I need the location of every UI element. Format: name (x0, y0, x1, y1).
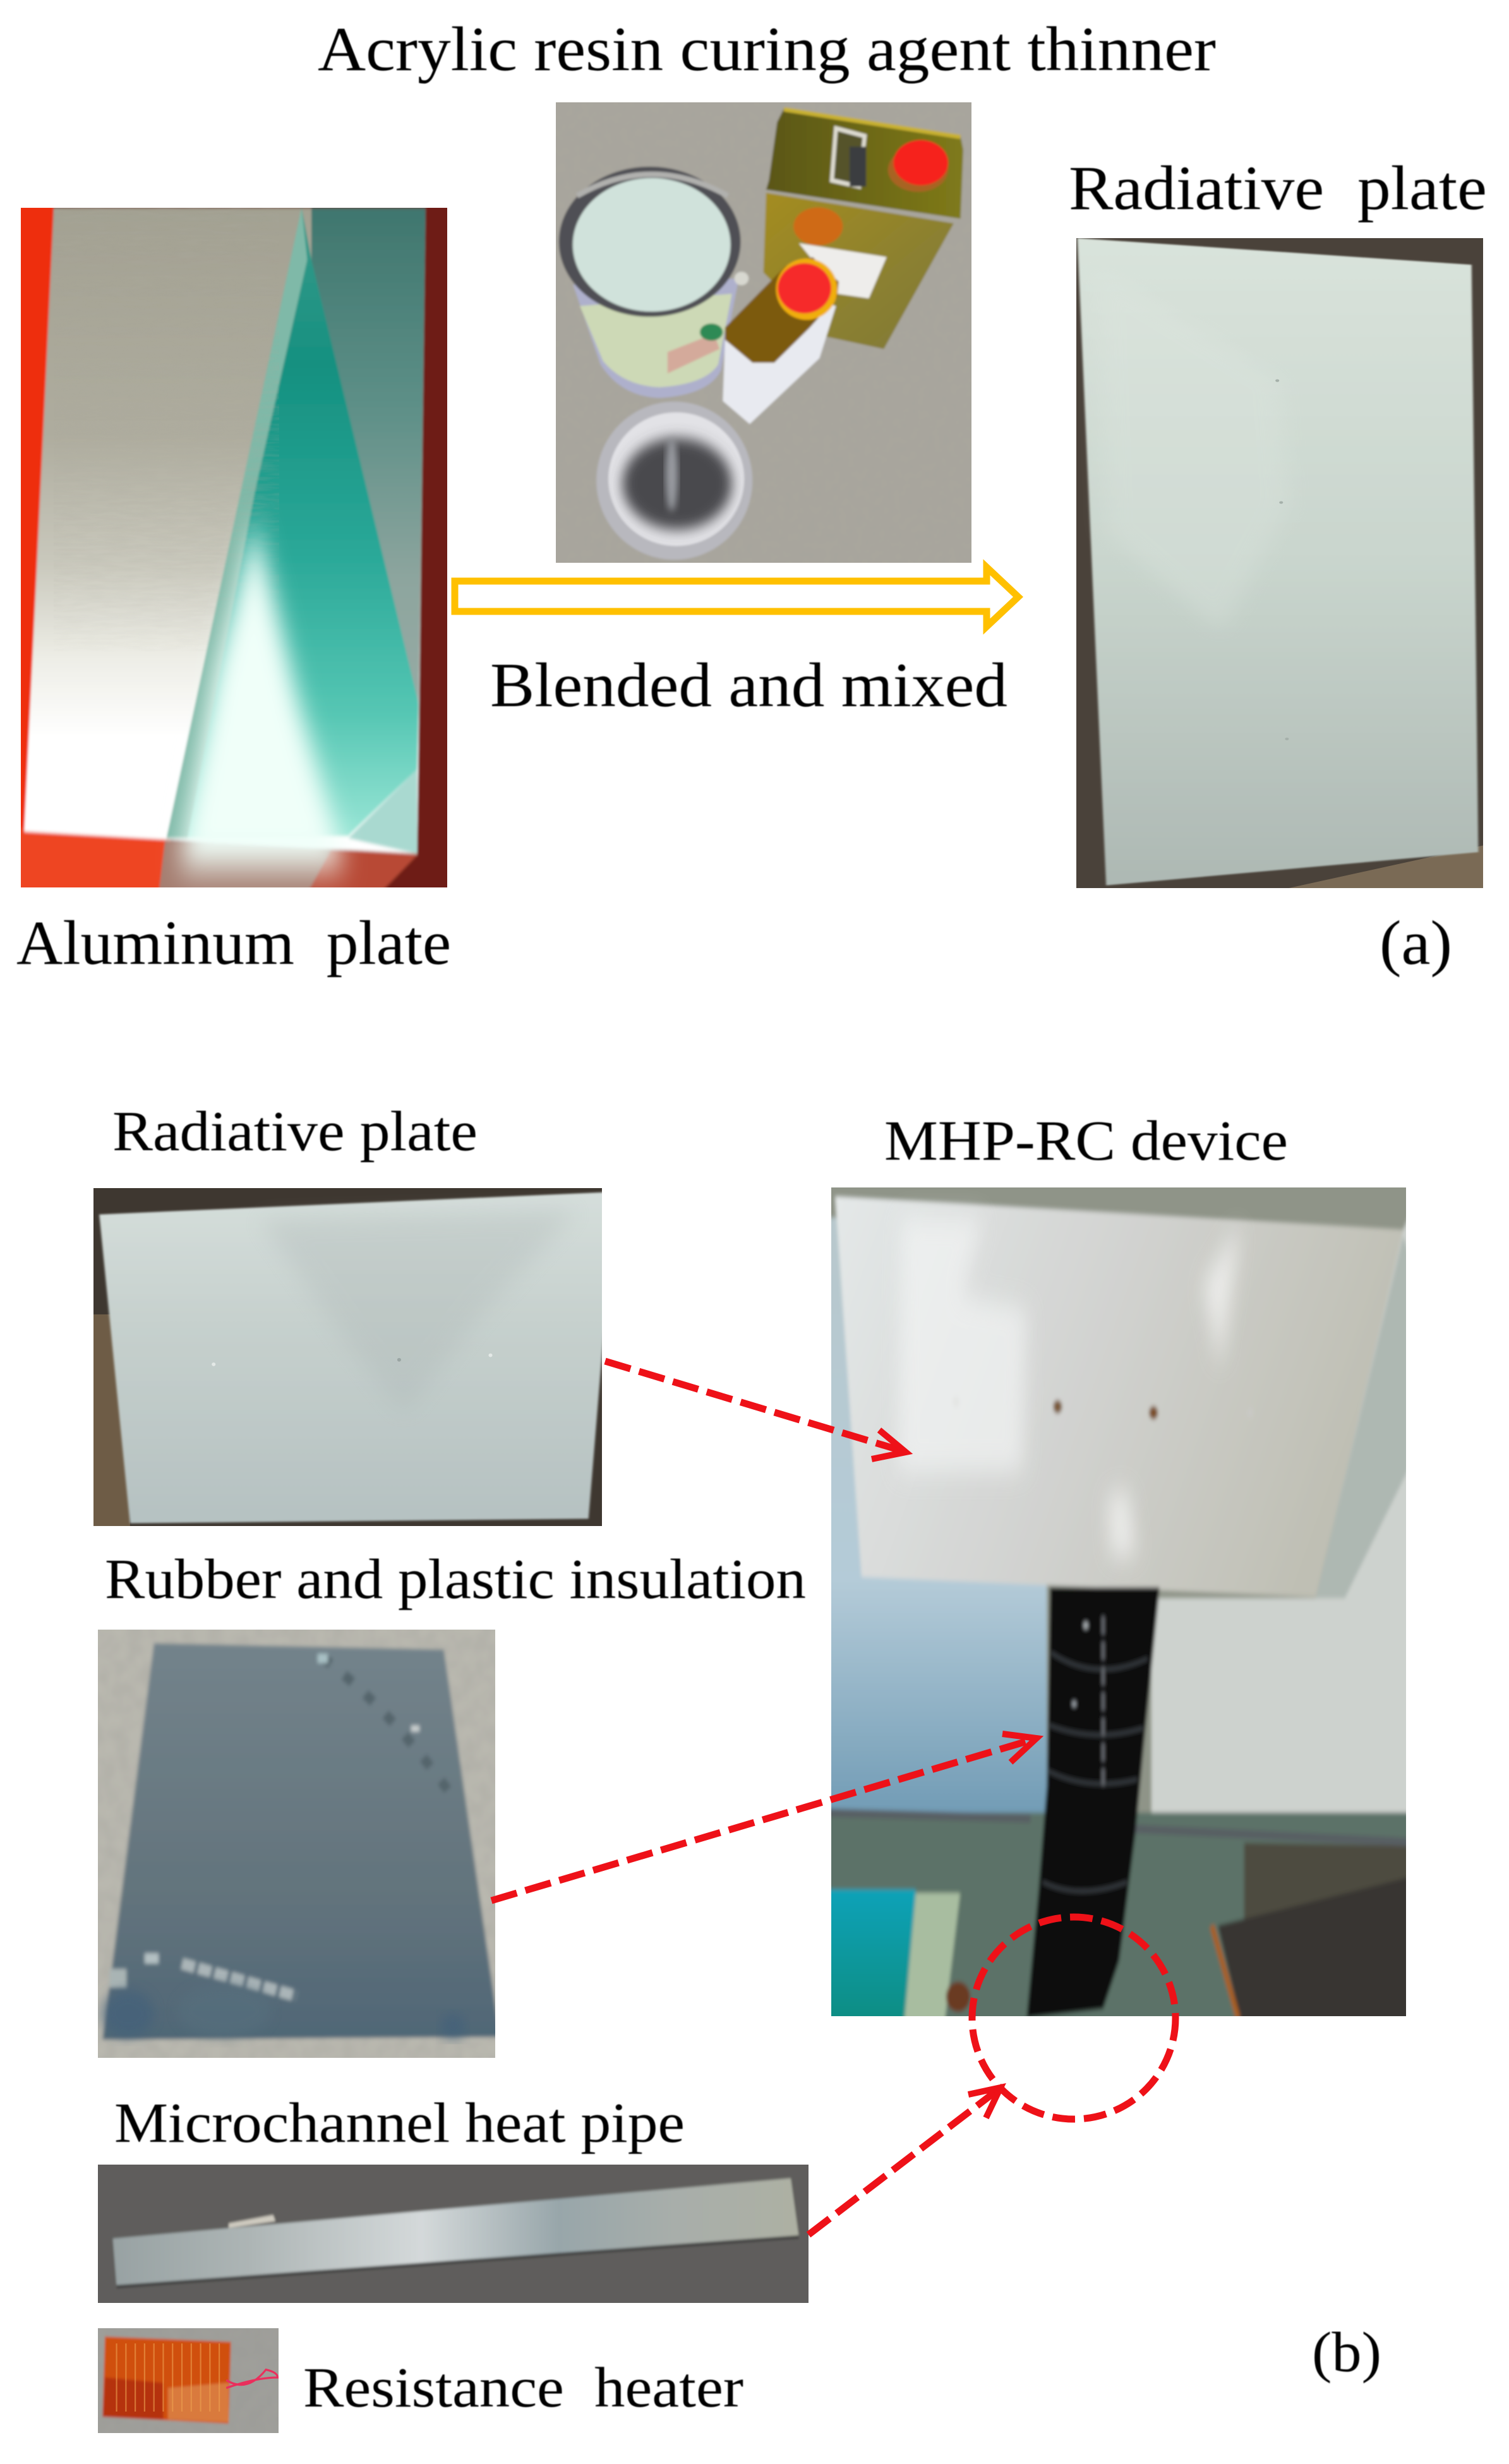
small can (723, 291, 836, 424)
gold can (764, 193, 954, 349)
photo: MHP-RC device (821, 1181, 1426, 2030)
label: acrylic resin: Acrylic resin curing agent thinner (318, 14, 1216, 84)
lid (596, 402, 752, 560)
label: radiative plate (a): Radiative plate (1069, 153, 1487, 223)
photo: paint cans (550, 95, 988, 585)
photo: finished radiative plate (1058, 226, 1500, 899)
arrow: insulation to device (491, 1734, 1037, 1901)
photo: aluminum plate with green film (13, 202, 464, 911)
panel (a): coating preparation (13, 14, 1500, 978)
label: panel b: (b) (1312, 2321, 1381, 2384)
label: blended and mixed: Blended and mixed (490, 650, 1007, 720)
label: aluminum plate: Aluminum plate (16, 908, 451, 978)
photo: radiative plate (b) (77, 1178, 615, 1541)
photo: rubber and plastic insulation (88, 1623, 509, 2069)
callout: dashed circle (972, 1917, 1175, 2119)
arrow: heat pipe to device (809, 2088, 1001, 2235)
label: MHP-RC device: MHP-RC device (884, 1110, 1288, 1172)
photo: microchannel heat pipe (88, 2147, 836, 2314)
light wedge on the film (179, 521, 346, 867)
label: panel a: (a) (1380, 908, 1452, 978)
plate glare (898, 1218, 1240, 1556)
arrow: radiative plate to device (605, 1361, 906, 1459)
panel (b): device assembly (77, 1100, 1426, 2441)
label: radiative plate (b): Radiative plate (112, 1100, 478, 1163)
photo: resistance heater (88, 2320, 289, 2441)
arrow: blended and mixed (455, 567, 1018, 627)
label: rubber and plastic insulation: Rubber and plastic insulation (105, 1548, 806, 1611)
label: microchannel heat pipe: Microchannel heat pipe (114, 2092, 685, 2154)
paint can (573, 279, 739, 398)
label: resistance heater: Resistance heater (303, 2357, 743, 2419)
